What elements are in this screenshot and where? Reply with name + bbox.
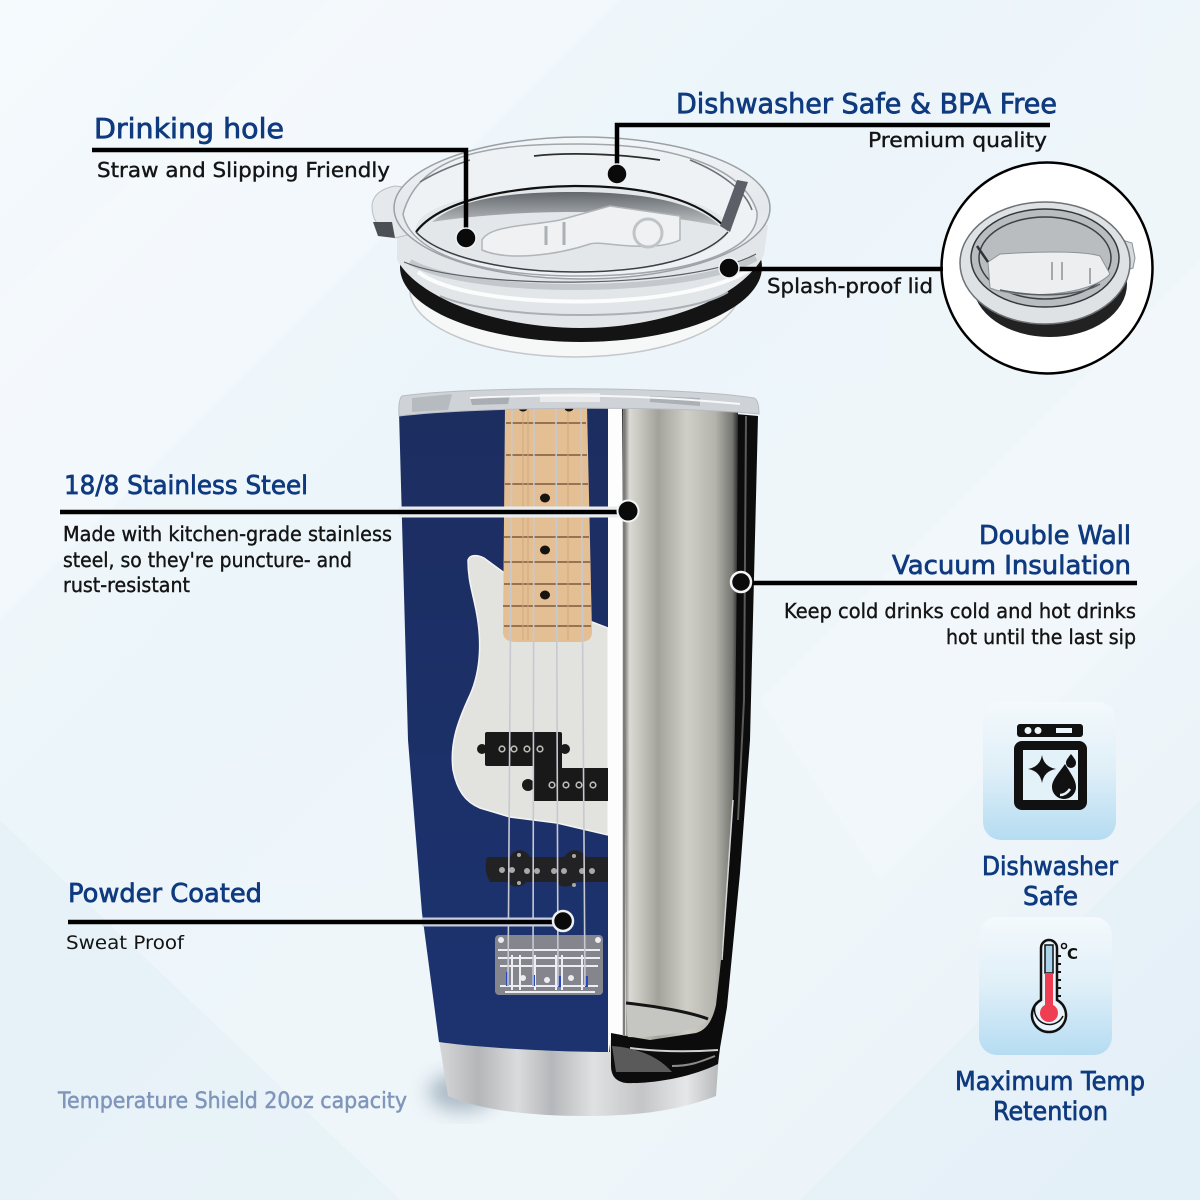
label: Dishwasher <box>982 852 1118 882</box>
marker dot <box>731 572 751 592</box>
heading: Powder Coated <box>68 879 262 909</box>
lid bottom seat <box>410 223 740 357</box>
label: Maximum Temp <box>955 1067 1145 1097</box>
description <box>784 599 1136 649</box>
inner steel wall <box>624 404 738 1040</box>
lid well <box>416 187 728 271</box>
callout: splash-proof lid <box>719 258 943 298</box>
inner bottom reflections <box>626 1004 708 1037</box>
label <box>955 1067 1145 1127</box>
inset lid circle <box>942 162 1152 374</box>
label: Splash-proof lid <box>767 274 933 298</box>
steel edge highlight <box>623 404 625 1036</box>
rubber gasket <box>400 192 762 342</box>
navy printed body <box>399 404 610 1052</box>
pickups <box>477 732 608 801</box>
heading: Double Wall <box>979 521 1131 551</box>
lid <box>372 137 770 357</box>
description: Premium quality <box>868 128 1047 152</box>
tumbler <box>399 389 759 1116</box>
leader line <box>741 581 1137 585</box>
description <box>63 522 392 597</box>
pickguard <box>452 556 608 835</box>
heading: Drinking hole <box>94 112 284 145</box>
bridge <box>495 935 603 995</box>
feature: maximum temp retention <box>955 917 1145 1127</box>
leader line <box>92 150 466 238</box>
strings <box>508 406 585 986</box>
marker dot <box>719 258 739 278</box>
sip slider <box>482 206 680 256</box>
description: Keep cold drinks cold and hot drinks <box>784 599 1136 623</box>
description: Sweat Proof <box>66 932 185 954</box>
label <box>982 852 1118 912</box>
frets <box>503 423 591 626</box>
leader line <box>729 267 943 271</box>
lid highlights <box>534 154 660 160</box>
marker dot <box>553 911 573 931</box>
label: Safe <box>1023 882 1078 912</box>
callout: dishwasher safe and BPA free <box>607 87 1057 184</box>
fretboard <box>503 406 592 642</box>
tumbler lid rim <box>399 389 759 416</box>
icon: dishwasher <box>1014 724 1087 810</box>
callout: double wall vacuum insulation <box>731 521 1137 649</box>
tumbler ground shadow <box>428 1072 496 1112</box>
heading: Dishwasher Safe & BPA Free <box>676 87 1057 120</box>
description: Straw and Slipping Friendly <box>97 158 390 182</box>
tile <box>983 702 1116 840</box>
stainless steel base <box>439 1040 720 1116</box>
callout: drinking hole <box>92 112 476 248</box>
marker dot <box>456 228 476 248</box>
leader line <box>399 506 628 518</box>
capacity note: Temperature Shield 20oz capacity <box>57 1089 407 1114</box>
icon: thermometer: C <box>1067 945 1078 963</box>
lid skirt <box>397 225 768 328</box>
description: Made with kitchen-grade stainless <box>63 522 392 546</box>
tile <box>979 917 1112 1055</box>
small lid body <box>1122 240 1135 272</box>
black outer wall and floor <box>611 404 758 1083</box>
leader line <box>617 125 1050 174</box>
small lid gasket <box>973 231 1127 337</box>
fret markers <box>518 404 574 600</box>
small lid slider <box>988 252 1110 295</box>
lid rim <box>394 137 770 279</box>
callout: stainless steel <box>60 471 638 597</box>
jazz pickup <box>486 850 608 886</box>
callout: powder coated <box>66 879 573 954</box>
guitar artwork <box>452 404 608 995</box>
description: rust-resistant <box>63 573 190 597</box>
heading <box>892 521 1131 581</box>
white cut edge <box>608 404 627 1052</box>
leader line <box>422 918 563 926</box>
icon: thermometer <box>1032 940 1078 1032</box>
marker dot <box>607 164 627 184</box>
description: hot until the last sip <box>946 625 1136 649</box>
feature: dishwasher safe <box>982 702 1118 912</box>
label: Retention <box>993 1097 1108 1127</box>
heading: 18/8 Stainless Steel <box>64 471 308 501</box>
marker dot <box>618 500 638 522</box>
lid tab <box>372 186 420 238</box>
description: steel, so they're puncture- and <box>63 548 352 572</box>
heading: Vacuum Insulation <box>892 551 1131 581</box>
